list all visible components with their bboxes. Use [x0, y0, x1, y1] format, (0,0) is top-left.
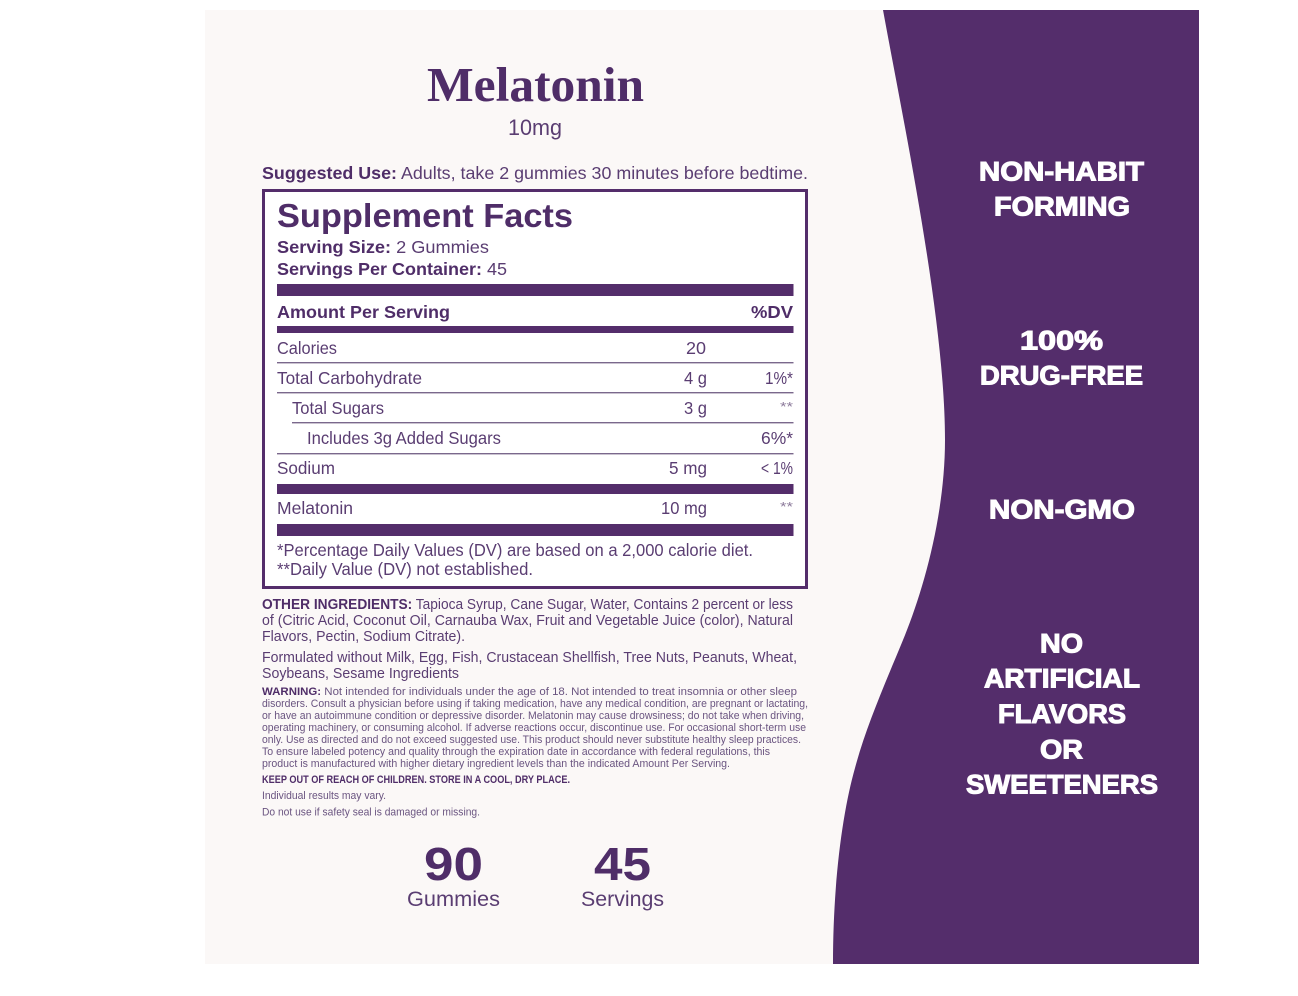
other ingredients	[262, 597, 793, 645]
title block	[427, 57, 644, 140]
claim: drug-free	[980, 326, 1143, 390]
row: melatonin: **	[780, 499, 793, 514]
row: total sugars	[292, 398, 793, 418]
results disclaimer: Individual results may vary.	[262, 790, 386, 802]
storage note: KEEP OUT OF REACH OF CHILDREN. STORE IN A COOL, DRY PLACE.	[262, 774, 570, 786]
claim: non-gmo: NON-GMO	[989, 494, 1135, 524]
claim: no artificial flavors or sweeteners	[966, 628, 1158, 800]
row: added sugars: 6%*	[761, 428, 793, 448]
claim: no artificial flavors or sweeteners: SWEETENERS	[966, 770, 1158, 800]
row: sodium: < 1%	[761, 458, 793, 478]
row: melatonin: Melatonin	[277, 498, 353, 518]
row: total carbohydrate: 4 g	[684, 368, 707, 388]
heading: Supplement Facts	[277, 197, 573, 234]
panel: purple wave sidebar	[833, 10, 1199, 964]
warning text: product is manufactured with higher dietary ingredient levels than the indicated Amount Per Serving.	[262, 758, 730, 770]
warning text	[262, 686, 808, 770]
stat: gummies: 90	[424, 838, 483, 890]
row: total carbohydrate: Total Carbohydrate	[277, 368, 422, 388]
table header: %DV	[751, 302, 793, 322]
other ingredients: of (Citric Acid, Coconut Oil, Carnauba Wax, Fruit and Vegetable Juice (color), Natural	[262, 613, 793, 629]
serving size: Serving Size: 2 Gummies	[277, 237, 489, 257]
footnotes	[277, 540, 753, 579]
servings per container: Servings Per Container: 45	[277, 259, 507, 279]
row: added sugars	[307, 428, 793, 448]
warning text: operating machinery, or consuming alcohol. If adverse reactions occur, discontinue use. For occasional short-term use	[262, 722, 806, 734]
row: sodium: Sodium	[277, 458, 335, 478]
warning text: WARNING: Not intended for individuals under the age of 18. Not intended to treat insomnia or other sleep	[262, 686, 797, 698]
allergen statement: Formulated without Milk, Egg, Fish, Crustacean Shellfish, Tree Nuts, Peanuts, Wheat,	[262, 650, 797, 666]
row: calories: Calories	[277, 338, 337, 358]
claim: drug-free: 100%	[1020, 326, 1103, 356]
row: sodium	[277, 458, 793, 478]
table header: Amount Per Serving	[277, 302, 450, 322]
warning text: disorders. Consult a physician before using if taking medication, have any medical condition, are pregnant or lactating,	[262, 698, 808, 710]
stat: servings	[581, 838, 664, 911]
suggested use: Suggested Use: Adults, take 2 gummies 30 minutes before bedtime.	[262, 163, 808, 183]
other ingredients: OTHER INGREDIENTS: Tapioca Syrup, Cane Sugar, Water, Contains 2 percent or less	[262, 597, 793, 613]
row: sodium: 5 mg	[669, 458, 707, 478]
warning text: or have an autoimmune condition or depressive disorder. Melatonin may cause drowsiness; do not take when driving,	[262, 710, 804, 722]
row: total carbohydrate: 1%*	[765, 368, 793, 388]
allergen statement: Soybeans, Sesame Ingredients	[262, 666, 459, 682]
row: added sugars: Includes 3g Added Sugars	[307, 428, 501, 448]
warning text: To ensure labeled potency and quality through the expiration date in accordance with federal regulations, this	[262, 746, 770, 758]
row: calories	[277, 338, 706, 358]
stat: servings: Servings	[581, 888, 664, 911]
table header	[277, 302, 793, 322]
claim: no artificial flavors or sweeteners: NO	[1040, 628, 1083, 658]
claim: no artificial flavors or sweeteners: FLAVORS	[998, 699, 1126, 729]
stat: gummies	[407, 838, 500, 911]
claim: no artificial flavors or sweeteners: ARTIFICIAL	[984, 664, 1140, 694]
row: melatonin: 10 mg	[661, 498, 707, 518]
stat: servings: 45	[594, 838, 651, 890]
footnotes: **Daily Value (DV) not established.	[277, 559, 533, 579]
row: total sugars: 3 g	[684, 398, 707, 418]
row: calories: 20	[686, 338, 706, 358]
footnotes: *Percentage Daily Values (DV) are based on a 2,000 calorie diet.	[277, 540, 753, 560]
claim: non-habit forming	[979, 156, 1145, 221]
row: total sugars: Total Sugars	[292, 398, 384, 418]
claim: non-habit forming: NON-HABIT	[979, 156, 1145, 186]
stat: gummies: Gummies	[407, 888, 500, 911]
allergen statement	[262, 650, 797, 682]
dosage: 10mg	[508, 115, 562, 140]
other ingredients: Flavors, Pectin, Sodium Citrate).	[262, 629, 465, 645]
row: total carbohydrate	[277, 368, 793, 388]
warning text: only. Use as directed and do not exceed suggested use. This product should never substitute healthy sleep practices.	[262, 734, 801, 746]
row: total sugars: **	[780, 399, 793, 414]
claim: drug-free: DRUG-FREE	[980, 360, 1143, 390]
claim: no artificial flavors or sweeteners: OR	[1040, 734, 1083, 764]
claim: non-habit forming: FORMING	[994, 191, 1130, 221]
title: Melatonin	[427, 57, 644, 112]
row: melatonin	[277, 498, 793, 518]
panel: supplement facts	[264, 190, 806, 588]
panel: background	[205, 10, 1199, 964]
safety seal note: Do not use if safety seal is damaged or missing.	[262, 806, 480, 818]
